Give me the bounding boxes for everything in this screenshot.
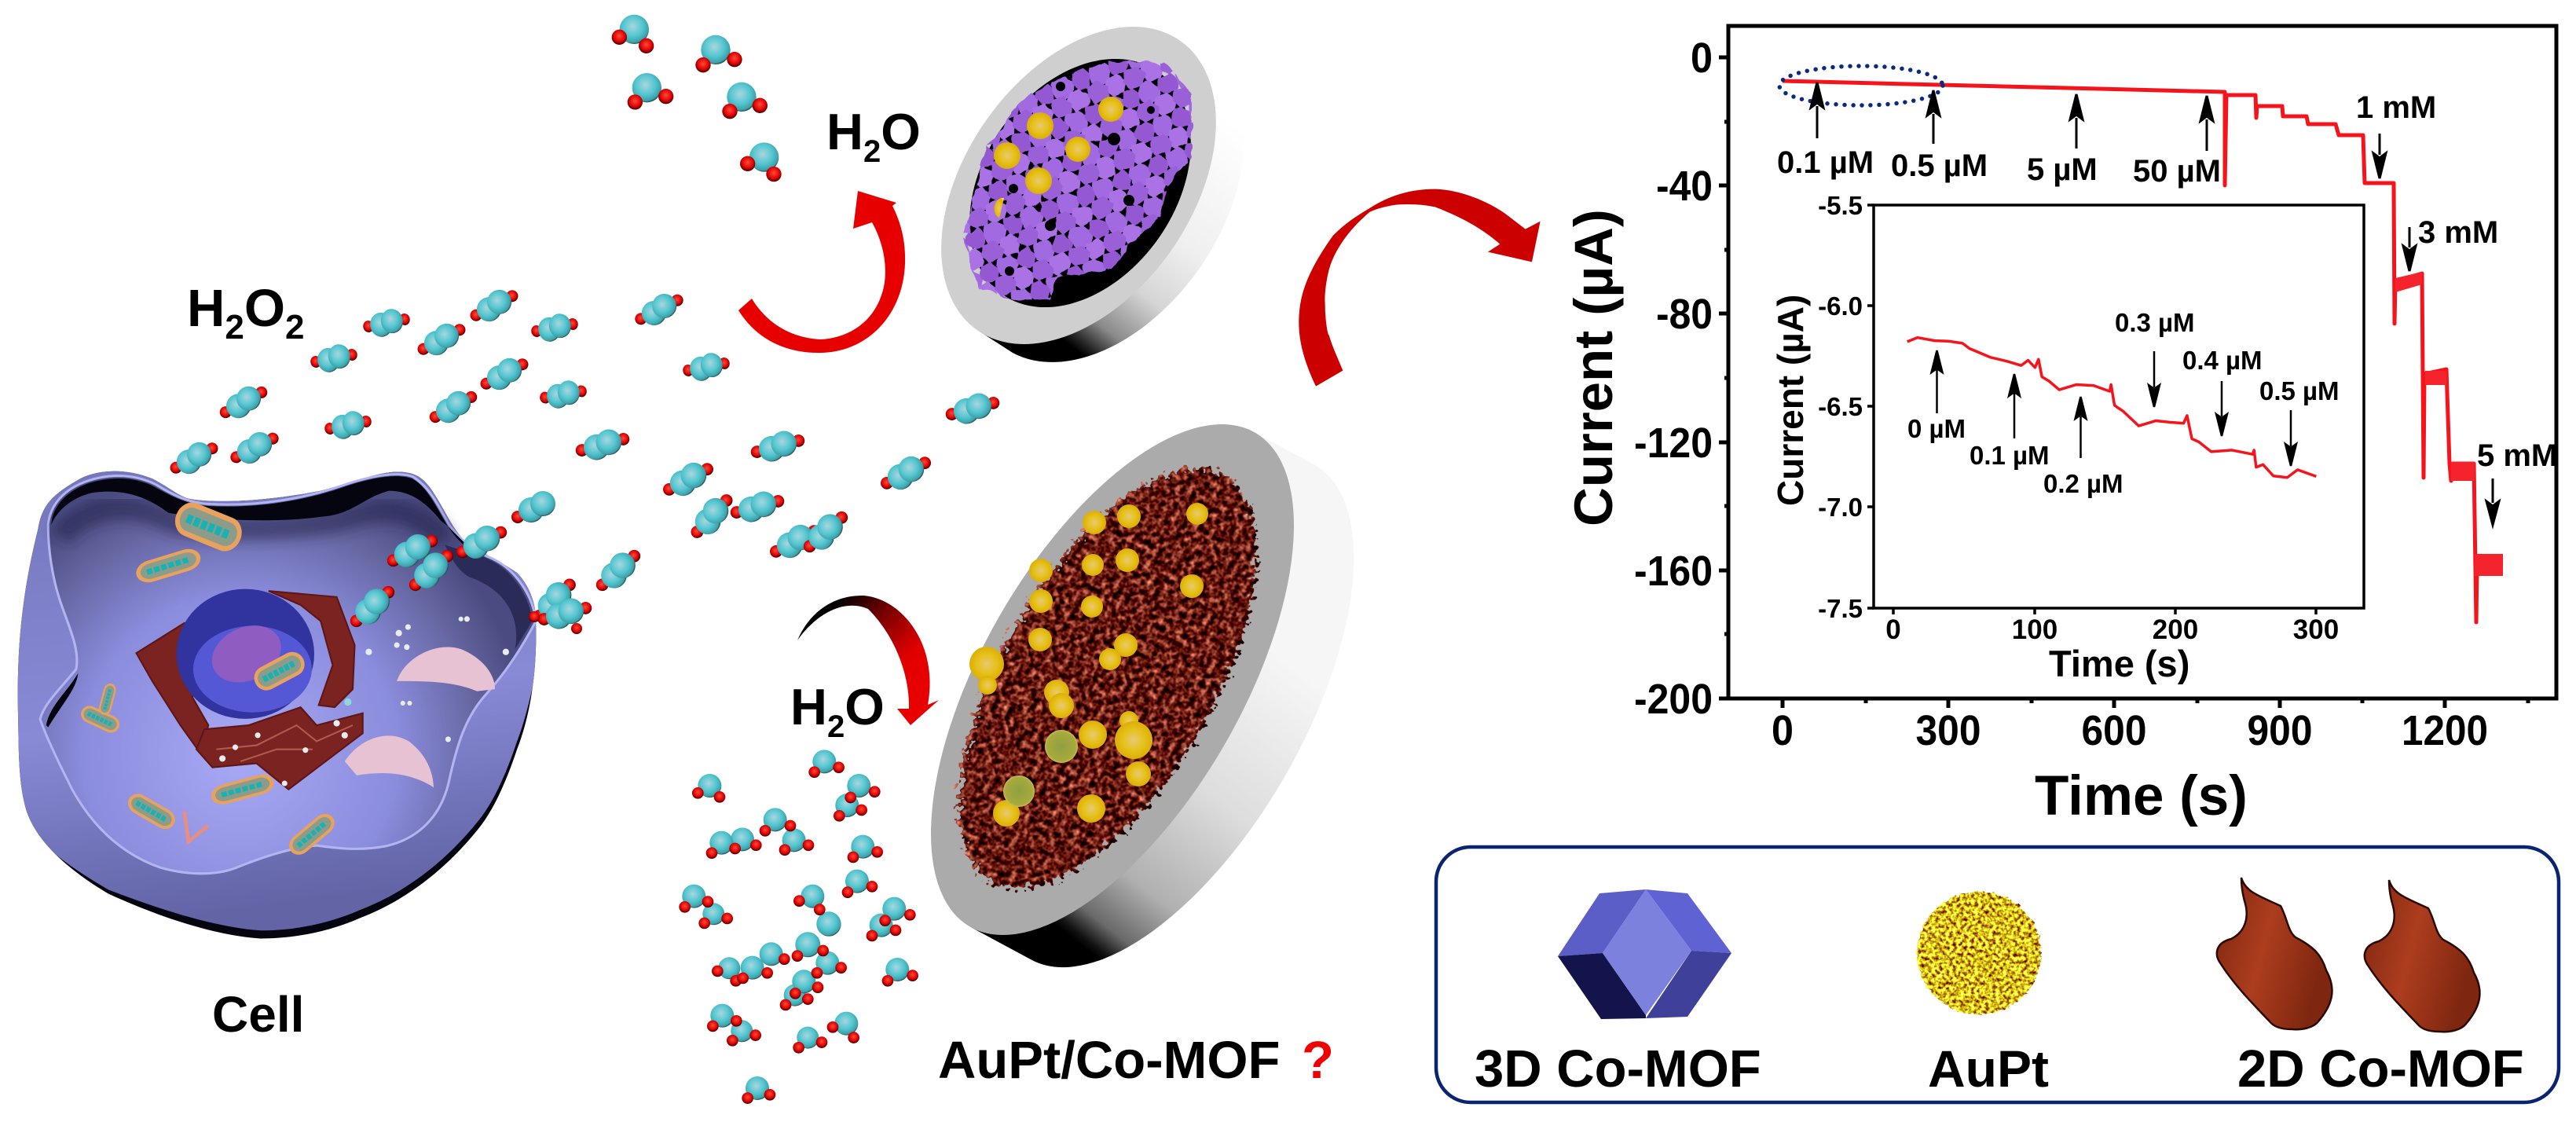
inset arrows bbox=[1931, 350, 2296, 466]
vesicles bbox=[219, 616, 509, 786]
y axis tick labels: -120 bbox=[1634, 420, 1713, 467]
y axis tick labels: -40 bbox=[1656, 163, 1713, 210]
main amperometric chart bbox=[1563, 26, 2557, 827]
x axis tick labels: 600 bbox=[2082, 707, 2146, 754]
inset concentration labels bbox=[1907, 308, 2340, 498]
inset concentration labels: 0.2 µM bbox=[2043, 469, 2123, 498]
mitochondria bbox=[80, 501, 336, 857]
inset y tick labels: -7.5 bbox=[1818, 594, 1863, 623]
inset x tick labels: 0 bbox=[1885, 614, 1901, 645]
icon: 3D Co-MOF polyhedron bbox=[1558, 889, 1731, 1019]
y axis title: Current (µA) bbox=[1563, 209, 1624, 526]
label: H2O bottom: O bbox=[845, 678, 885, 735]
inset concentration labels: 0.1 µM bbox=[1970, 441, 2050, 470]
arrow: H2O2 to H2O at top electrode bbox=[738, 191, 905, 353]
y axis tick labels: 0 bbox=[1691, 35, 1713, 82]
oxidised AuPt particles bbox=[1003, 730, 1078, 807]
disk ring bbox=[858, 368, 1367, 992]
AuPt particles bbox=[994, 97, 1123, 218]
right wall recess bbox=[445, 544, 533, 649]
golgi apparatus bbox=[345, 647, 495, 787]
plot frame with ticks bbox=[1719, 26, 2556, 708]
label: 2D Co-MOF: 2D Co-MOF bbox=[2237, 1040, 2524, 1098]
current trace bbox=[1783, 81, 2503, 622]
label: H2O bottom: 2 bbox=[827, 710, 845, 744]
inset x tick labels: 300 bbox=[2293, 614, 2339, 645]
cell outer membrane shadow bbox=[18, 471, 536, 938]
x axis tick labels: 1200 bbox=[2402, 707, 2488, 754]
x axis tick labels: 300 bbox=[1915, 707, 1981, 754]
y axis tick labels: -80 bbox=[1656, 291, 1713, 338]
label: H2O top: 2 bbox=[863, 134, 881, 169]
electrode: AuPt/Co-MOF disk bbox=[858, 368, 1367, 992]
inset concentration labels: 0.3 µM bbox=[2115, 308, 2195, 337]
label: H2O2: 2 bbox=[225, 308, 244, 346]
endoplasmic reticulum, behind nucleus bbox=[136, 591, 355, 754]
label: 3D Co-MOF: 3D Co-MOF bbox=[1475, 1040, 1761, 1098]
endoplasmic reticulum, front bbox=[196, 707, 363, 790]
label: H2O2: 2 bbox=[285, 308, 304, 346]
label: H2O2: O bbox=[244, 279, 285, 338]
red question mark: ? bbox=[1302, 1031, 1334, 1090]
inset concentration labels: 0.4 µM bbox=[2182, 346, 2263, 375]
concentration labels: 50 µM bbox=[2133, 154, 2221, 189]
concentration labels bbox=[1777, 90, 2557, 473]
inset chart bbox=[1770, 191, 2364, 684]
inset y tick labels: -5.5 bbox=[1818, 191, 1863, 220]
x axis title: Time (s) bbox=[2035, 765, 2248, 827]
concentration labels: 3 mM bbox=[2418, 215, 2498, 250]
legend border bbox=[1436, 847, 2559, 1102]
nucleus bbox=[176, 589, 314, 719]
inset concentration labels: 0 µM bbox=[1907, 414, 1966, 443]
inner rim shadow bbox=[51, 476, 485, 558]
inset y axis title: Current (µA) bbox=[1770, 295, 1811, 506]
2D Co-MOF surface bbox=[899, 422, 1317, 934]
inset x tick labels bbox=[1885, 614, 2339, 645]
label: AuPt/Co-MOF: AuPt/Co-MOF bbox=[938, 1031, 1280, 1090]
legend panel bbox=[1436, 847, 2559, 1102]
icon: AuPt nanoparticle bbox=[1917, 892, 2041, 1014]
concentration labels: 0.1 µM bbox=[1777, 145, 1874, 180]
arrow: to chart bbox=[1299, 189, 1541, 387]
cell illustration bbox=[17, 471, 537, 938]
label: H2O top: H bbox=[826, 103, 863, 160]
electrode: 3D Co-MOF disk bbox=[885, 0, 1273, 395]
inset trace bbox=[1907, 338, 2316, 478]
concentration labels: 5 mM bbox=[2477, 438, 2557, 473]
x axis tick labels: 900 bbox=[2247, 707, 2313, 754]
concentration arrows bbox=[1811, 82, 2499, 525]
label: H2O bottom: H bbox=[790, 678, 827, 735]
arrow: H2O2 to H2O at bottom electrode bbox=[797, 596, 939, 725]
purple Co-MOF crystals bbox=[963, 60, 1192, 301]
H2O2 molecules bbox=[165, 282, 1002, 635]
dotted ellipse highlight bbox=[1779, 66, 1943, 105]
inset x tick labels: 100 bbox=[2012, 614, 2058, 645]
water molecules, bottom bbox=[679, 750, 918, 1104]
inset y tick labels: -7.0 bbox=[1818, 493, 1863, 522]
concentration labels: 0.5 µM bbox=[1891, 148, 1988, 183]
soft shading under the rim bbox=[60, 508, 445, 541]
label: H2O2: H bbox=[187, 279, 225, 338]
y axis tick labels bbox=[1634, 35, 1713, 723]
small organelle bbox=[185, 812, 208, 842]
label: AuPt: AuPt bbox=[1928, 1040, 2049, 1098]
inset concentration labels: 0.5 µM bbox=[2259, 376, 2340, 405]
inset y tick labels: -6.0 bbox=[1818, 292, 1863, 321]
x axis tick labels: 0 bbox=[1772, 707, 1794, 754]
cell interior floor bbox=[40, 475, 536, 874]
y axis tick labels: -160 bbox=[1634, 548, 1713, 595]
inset frame with ticks bbox=[1867, 205, 2364, 614]
disk side wall bbox=[980, 39, 1244, 362]
disk side wall bbox=[971, 432, 1354, 967]
concentration labels: 5 µM bbox=[2027, 152, 2098, 187]
inset x axis title: Time (s) bbox=[2049, 643, 2189, 684]
electrode black surface bbox=[924, 16, 1237, 350]
disk ring bbox=[885, 0, 1273, 395]
y axis tick labels: -200 bbox=[1634, 676, 1713, 723]
water molecules, top bbox=[612, 15, 782, 182]
x axis tick labels bbox=[1772, 707, 2488, 754]
AuPt particles bbox=[969, 503, 1208, 827]
left fold shadow bbox=[46, 673, 78, 728]
icon: 2D Co-MOF flakes bbox=[2217, 878, 2479, 1032]
inset y tick labels bbox=[1818, 191, 1863, 623]
inset x tick labels: 200 bbox=[2153, 614, 2198, 645]
concentration labels: 1 mM bbox=[2356, 90, 2436, 125]
gaps between crystals bbox=[1005, 82, 1155, 276]
cell body bbox=[17, 471, 536, 930]
label: H2O top: O bbox=[881, 103, 921, 160]
label: Cell: Cell bbox=[212, 986, 304, 1043]
inset y tick labels: -6.5 bbox=[1818, 392, 1863, 421]
